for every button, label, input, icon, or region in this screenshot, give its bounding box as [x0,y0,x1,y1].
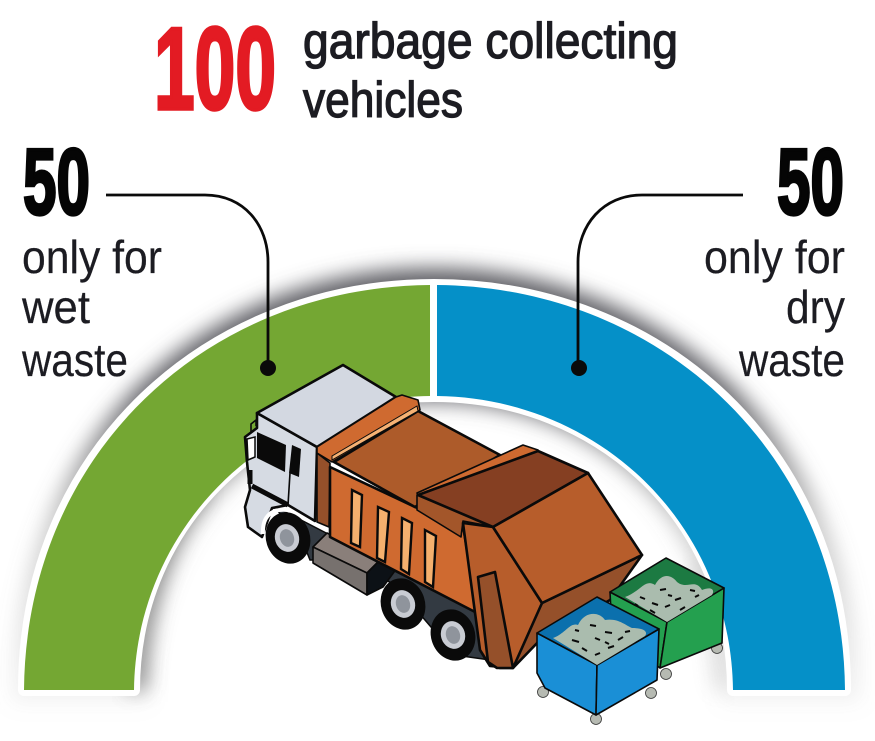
right label: only for dry waste: dry [786,281,845,333]
compactor rear face [493,473,642,603]
title text: vehicles [303,72,463,128]
compactor side [463,523,542,668]
compactor top [418,451,588,527]
arch white outline [24,285,845,690]
title text: garbage collecting [303,13,678,69]
left connector [106,195,276,376]
panel: dry waste blue arc [437,285,845,690]
cab front [245,413,317,537]
middle wheel [374,572,432,636]
title text [303,13,678,128]
right connector [571,195,743,376]
lift arm [478,572,513,668]
icon: garbage truck [245,365,642,668]
chassis [272,505,490,660]
rear upper band [417,445,538,500]
icon: green bin [610,558,724,680]
body front pillar [317,453,330,527]
left label: only for wet waste: wet [21,281,90,333]
compactor underside [500,555,642,668]
left label: only for wet waste: only for [22,231,162,283]
left label: only for wet waste [21,231,162,386]
orange roof band [317,395,420,462]
right label: only for dry waste: waste [738,334,845,386]
left count 50: 50 [23,129,90,234]
rear wheel [424,603,482,667]
tank [313,533,397,595]
right label: only for dry waste [704,231,845,386]
left label: only for wet waste: waste [21,334,128,386]
title number 100: 100 [154,3,276,134]
front wheel [259,506,317,570]
side windows [351,490,436,587]
cab roof [257,365,396,447]
cab windows and grille [247,420,301,534]
right label: only for dry waste: only for [704,231,845,283]
compactor small face [417,495,495,537]
body top [334,411,500,507]
body side [330,467,477,613]
panel: wet waste green arc [24,285,430,690]
icon: blue bin [537,597,659,724]
arch shadow [12,268,860,702]
